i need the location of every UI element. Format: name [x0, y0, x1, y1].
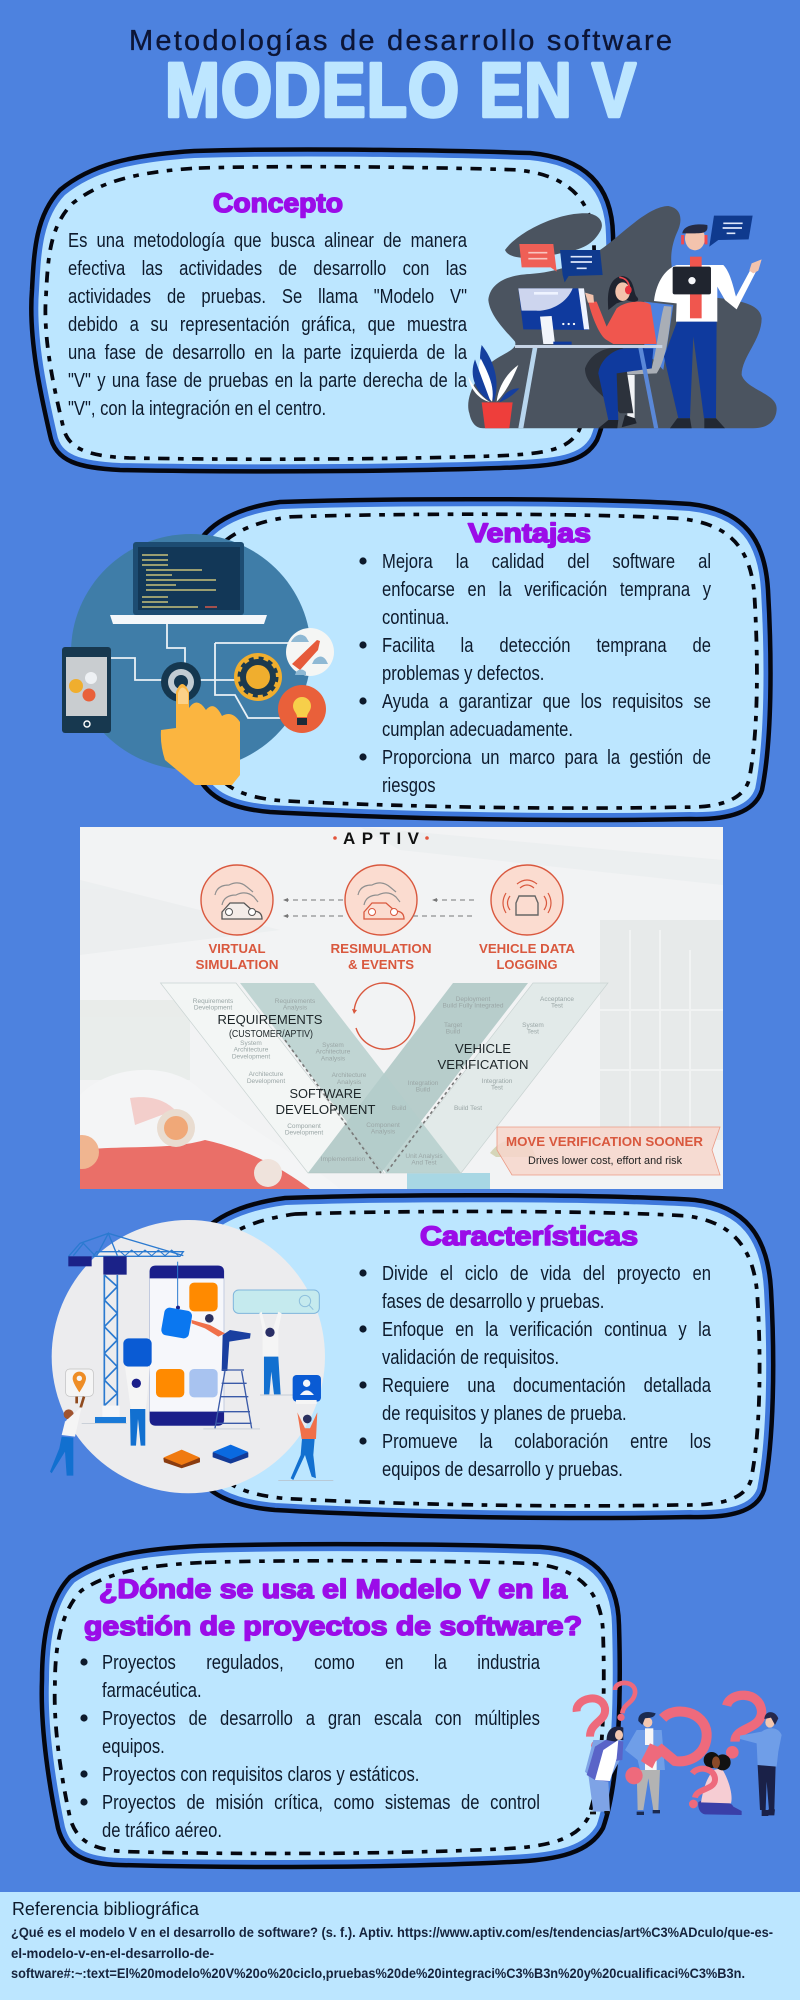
heading: caracteristicas: Características	[420, 1221, 638, 1251]
list: ventajas	[359, 548, 714, 804]
icon: people with question marks	[577, 1683, 782, 1816]
labels: V detail: Test	[527, 1028, 539, 1036]
heading: donde se usa: gestión de proyectos de software?	[84, 1611, 582, 1641]
list: caracteristicas: de requisitos y planes de prueba.	[382, 1403, 627, 1425]
text block: concepto: "V" y una fase de pruebas en la parte derecha de la	[68, 370, 467, 392]
panel: caracteristicas	[188, 1195, 773, 1518]
V diagram shapes	[160, 983, 608, 1173]
background building	[80, 920, 723, 1140]
labels: V detail: Architecture	[249, 1071, 283, 1078]
labels: V detail: Acceptance	[540, 996, 574, 1003]
list: ventajas: Mejora la calidad del software al	[382, 551, 711, 573]
labels: V detail: Analysis	[321, 1055, 346, 1062]
list: ventajas: problemas y defectos.	[382, 663, 544, 685]
labels: V detail: Integration	[408, 1080, 438, 1087]
footer: references: ¿Qué es el modelo V en el desarrollo de software? (s. f.). Aptiv. https://www.aptiv.com/es/tendencias/art%C3%ADculo/que-es-	[11, 1925, 773, 1940]
labels: V detail: Development	[285, 1130, 323, 1136]
callout: move verification sooner	[497, 1127, 720, 1175]
list: caracteristicas: validación de requisitos.	[382, 1347, 559, 1369]
heading: concepto: Concepto	[213, 188, 343, 218]
labels: stages: VEHICLE DATA	[479, 941, 576, 956]
text block: concepto: una fase de desarrollo en la parte izquierda de la	[68, 342, 467, 364]
title: main heading: MODELO EN V	[165, 48, 636, 134]
car and pool background	[65, 1070, 536, 1189]
labels: V detail: Architecture	[332, 1072, 366, 1079]
labels: V detail: Analysis	[337, 1079, 362, 1086]
labels: V detail: Target	[444, 1022, 462, 1029]
labels: V detail: REQUIREMENTS	[218, 1012, 323, 1027]
labels: V detail: Development	[232, 1053, 270, 1060]
labels: V detail: (CUSTOMER/APTIV)	[229, 1029, 313, 1040]
labels: V detail: System	[322, 1042, 344, 1049]
list: ventajas: riesgos	[382, 775, 436, 797]
text block: concepto	[68, 227, 470, 427]
labels: V detail: Unit Analysis	[405, 1153, 443, 1160]
icon: vehicle data logging	[491, 865, 563, 935]
heading: ventajas: Ventajas	[468, 518, 591, 548]
labels: stages: & EVENTS	[348, 957, 414, 972]
chart: aptiv V model diagram	[65, 827, 723, 1189]
icon: team working at desk	[468, 206, 777, 428]
footer: references: software#:~:text=El%20modelo%20V%20o%20ciclo,pruebas%20de%20integraci%C3%B3n%20y%20cualificaci%C3%B3n.	[11, 1966, 745, 1981]
labels: V detail: Deployment	[456, 996, 490, 1003]
labels: V detail: Development	[247, 1078, 285, 1085]
list: donde se usa: Proyectos de desarrollo a gran escala con múltiples	[102, 1708, 540, 1730]
list: ventajas: Ayuda a garantizar que los requisitos se	[382, 691, 711, 713]
icon: virtual simulation	[201, 865, 273, 935]
labels: V detail: Build	[416, 1086, 431, 1094]
labels: V detail: Implementation	[321, 1156, 366, 1163]
labels: V detail	[193, 996, 574, 1167]
list: ventajas: continua.	[382, 607, 449, 629]
text block: concepto: debido a su representación gráfica, que muestra	[68, 314, 467, 336]
list: caracteristicas	[359, 1260, 714, 1488]
heading: donde se usa	[84, 1574, 582, 1641]
labels: V detail: Architecture	[234, 1047, 269, 1054]
labels: V detail: VERIFICATION	[438, 1057, 528, 1072]
list: caracteristicas: Promueve la colaboración entre los	[382, 1431, 711, 1453]
labels: V detail: DEVELOPMENT	[276, 1102, 376, 1117]
labels: V detail: Test	[551, 1002, 563, 1010]
arrows: data flow	[283, 898, 474, 918]
labels: V detail: Requirements	[193, 998, 233, 1005]
icon: team building a mobile app	[50, 1220, 333, 1493]
labels: V detail: Component	[366, 1122, 400, 1129]
callout: move verification sooner: MOVE VERIFICATION SOONER	[506, 1134, 704, 1149]
list: donde se usa: equipos.	[102, 1736, 165, 1758]
aptiv logo: APTIV	[343, 829, 420, 848]
list: ventajas: Facilita la detección temprana de	[382, 635, 711, 657]
text block: concepto: Es una metodología que busca alinear de manera	[68, 230, 467, 252]
labels: V detail: Integration	[482, 1078, 512, 1085]
labels: V detail: System	[522, 1022, 544, 1029]
labels: V detail: Requirements	[275, 998, 315, 1005]
labels: stages: RESIMULATION	[330, 941, 432, 956]
labels: stages: LOGGING	[496, 957, 558, 972]
labels: stages: VIRTUAL	[208, 941, 266, 956]
labels: V detail: Architecture	[316, 1049, 351, 1056]
labels: V detail: VEHICLE	[455, 1041, 511, 1056]
list: donde se usa: Proyectos de misión crítica, como sistemas de control	[102, 1792, 540, 1814]
footer: references	[0, 1892, 800, 2000]
text block: concepto: efectiva las actividades de desarrollo con las	[68, 258, 467, 280]
labels: V detail: SOFTWARE	[290, 1086, 362, 1101]
list: ventajas: cumplan adecuadamente.	[382, 719, 573, 741]
labels: V detail: Build Fully Integrated	[442, 1002, 504, 1010]
icon: connected devices with pointing hand	[62, 534, 334, 785]
heading: donde se usa: ¿Dónde se usa el Modelo V en la	[99, 1574, 568, 1604]
callout: move verification sooner: Drives lower cost, effort and risk	[528, 1155, 682, 1167]
list: caracteristicas: equipos de desarrollo y pruebas.	[382, 1459, 623, 1481]
labels: V detail: Test	[491, 1084, 503, 1092]
panel: ventajas	[188, 499, 770, 820]
labels: V detail: Build Test	[454, 1105, 482, 1112]
list: donde se usa: farmacéutica.	[102, 1680, 202, 1702]
list: ventajas: enfocarse en la verificación temprana y	[382, 579, 711, 601]
list: caracteristicas: Divide el ciclo de vida del proyecto en	[382, 1263, 711, 1285]
footer: references: Referencia bibliográfica	[12, 1899, 200, 1919]
list: donde se usa	[80, 1649, 543, 1849]
panel: donde se usa	[42, 1544, 620, 1867]
list: donde se usa: Proyectos con requisitos claros y estáticos.	[102, 1764, 419, 1786]
text block: concepto: actividades de pruebas. Se llama "Modelo V"	[68, 286, 467, 308]
list: caracteristicas: Enfoque en la verificación continua y la	[382, 1319, 711, 1341]
list: ventajas: Proporciona un marco para la gestión de	[382, 747, 711, 769]
title: subtitle line: Metodologías de desarrollo software	[129, 25, 672, 57]
panel: concepto	[31, 150, 614, 471]
list: caracteristicas: fases de desarrollo y pruebas.	[382, 1291, 604, 1313]
labels: V detail: Analysis	[371, 1128, 396, 1136]
labels: V detail: Build	[446, 1028, 461, 1036]
text block: concepto: "V", con la integración en el centro.	[68, 398, 326, 420]
labels: stages	[196, 941, 576, 972]
labels: V detail: Build	[392, 1105, 407, 1112]
labels: V detail: Development	[194, 1004, 232, 1012]
footer: references: el-modelo-v-en-el-desarrollo-de-	[11, 1946, 214, 1961]
icon: resimulation	[345, 865, 417, 935]
list: caracteristicas: Requiere una documentación detallada	[382, 1375, 711, 1397]
labels: V detail: Analysis	[283, 1004, 308, 1012]
labels: V detail: Component	[287, 1123, 321, 1130]
labels: V detail: System	[240, 1040, 262, 1047]
list: donde se usa: Proyectos regulados, como en la industria	[102, 1652, 540, 1674]
labels: stages: SIMULATION	[196, 957, 278, 972]
list: donde se usa: de tráfico aéreo.	[102, 1820, 222, 1842]
labels: V detail: And Test	[411, 1160, 437, 1167]
